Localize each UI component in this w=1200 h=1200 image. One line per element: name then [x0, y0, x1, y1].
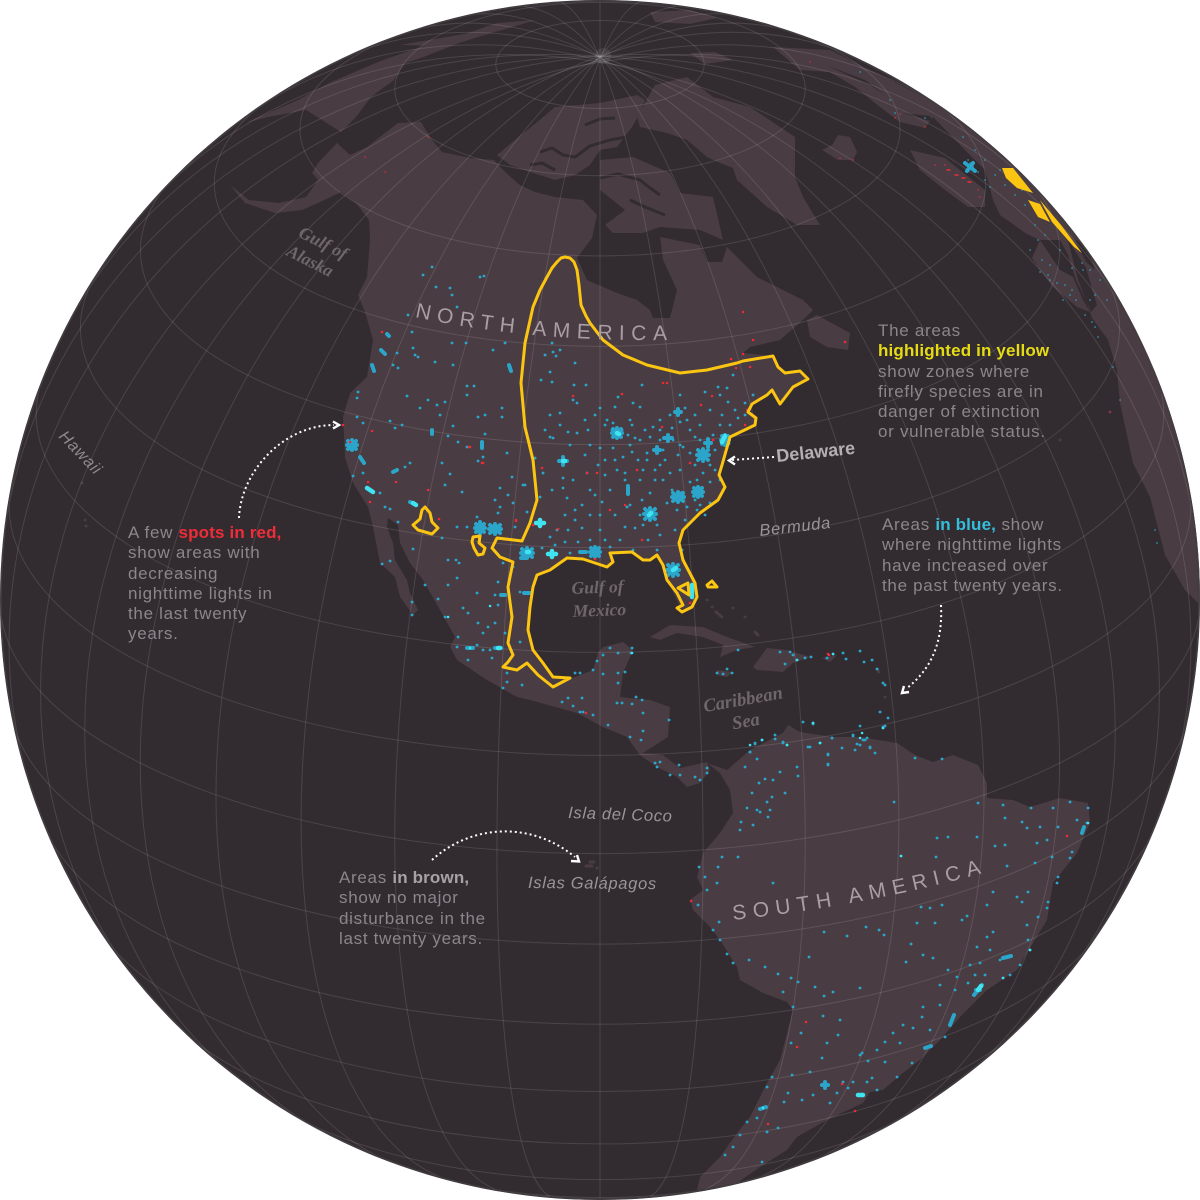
land: Arctic islands: [497, 95, 723, 240]
callout: red spots: A few spots in red,: [128, 523, 282, 542]
callout: blue spots: have increased over: [882, 556, 1048, 575]
callout: brown areas: show no major: [339, 888, 459, 907]
callout: yellow zones: or vulnerable status.: [878, 422, 1046, 441]
globe map: NORTH AMERICA: [416, 303, 667, 340]
continent label: South America: [733, 871, 990, 920]
land: small islands: [82, 412, 1110, 868]
callout: blue spots: [882, 515, 1063, 595]
arrow: to Galápagos: [432, 831, 579, 862]
red decreased-light spots: [343, 62, 1110, 1124]
land: North and Central America: [230, 122, 813, 787]
blue dots: eastern United States: [525, 343, 753, 560]
yellow firefly risk zones: [413, 168, 1082, 687]
label: Isla del Coco: Isla del Coco: [568, 804, 673, 826]
land: Iberia: [1032, 240, 1090, 312]
label: Gulf of Alaska: Alaska: [283, 240, 337, 281]
land: Mediterranean and Baltic seas: [828, 66, 1097, 312]
callout: red spots: the last twenty: [128, 604, 247, 623]
pole glow: [595, 48, 611, 64]
callout: brown areas: [339, 868, 486, 948]
callout: yellow zones: highlighted in yellow: [878, 341, 1049, 360]
callout: red spots: decreasing: [128, 564, 218, 583]
label: Islas Galápagos: Islas Galápagos: [528, 874, 657, 893]
callout: yellow zones: The areas: [878, 321, 961, 340]
blue dots: Europe and Africa: [860, 72, 1157, 543]
label: Caribbean Sea: Caribbean: [702, 683, 784, 717]
label: Gulf of Alaska: Gulf of: [296, 222, 353, 264]
bright cyan light spots: [367, 433, 1088, 1108]
arrow: to red spots: [239, 422, 339, 518]
callout: brown areas: disturbance in the: [339, 909, 486, 928]
land: Europe and Africa: [773, 47, 1200, 605]
bright city centres: [367, 433, 981, 1095]
callout: blue spots: the past twenty years.: [882, 576, 1063, 595]
label: Bermuda: Bermuda: [758, 514, 832, 540]
callout: brown areas: Areas in brown,: [339, 868, 469, 887]
continent label: North America: [415, 317, 672, 340]
land: British Isles: [910, 150, 985, 207]
label: Delaware: Delaware: [775, 438, 856, 466]
yellow outline: Texas pocket: [472, 536, 485, 555]
label: Caribbean Sea: Sea: [731, 710, 761, 734]
callout: yellow zones: [878, 321, 1050, 441]
callout: red spots: [128, 523, 282, 643]
label: Hawaii: Hawaii: [55, 427, 106, 479]
land: Arctic channels: [530, 118, 665, 215]
land: Cuba: [650, 625, 755, 657]
callout: yellow zones: show zones where: [878, 362, 1030, 381]
land: South America: [690, 725, 1090, 1190]
globe map: SOUTH AMERICA: [734, 860, 982, 920]
land: Iceland: [822, 135, 857, 160]
land: Siberia: [245, 20, 536, 132]
place labels: [55, 427, 832, 893]
blue dots: Central America and Caribbean: [562, 648, 888, 780]
blue dots: South America: [698, 724, 1088, 1162]
arrow: to Delaware: [729, 456, 774, 464]
ocean labels: [283, 220, 788, 739]
yellow zones: Europe limb: [1002, 168, 1082, 253]
callout: red spots: years.: [128, 624, 178, 643]
label: Gulf of Mexico: Gulf of: [571, 576, 626, 598]
land: Hispaniola: [753, 648, 810, 672]
callout: brown areas: last twenty years.: [339, 929, 483, 948]
land: polar islands: [400, 10, 733, 64]
blue increased-light spots: [347, 72, 1157, 1162]
callout: red spots: nighttime lights in: [128, 584, 273, 603]
callout: yellow zones: danger of extinction: [878, 402, 1040, 421]
land: Jamaica and Puerto Rico: [717, 655, 837, 677]
yellow outline: Bahamas pocket: [707, 581, 717, 587]
land: Greenland: [637, 77, 820, 225]
blue dots: western North America: [353, 267, 527, 688]
yellow outline: west Mexico pocket: [413, 507, 438, 534]
blue clusters: metropolitan areas: [347, 163, 1084, 1109]
callout: blue spots: Areas in blue, show: [882, 515, 1044, 534]
yellow outline: south Florida pocket: [678, 583, 689, 595]
yellow outline: eastern North America: [492, 257, 808, 687]
land: Newfoundland: [807, 315, 850, 350]
callout: red spots: show areas with: [128, 543, 260, 562]
label: Gulf of Mexico: Mexico: [571, 599, 627, 621]
arrow: to blue spots: [902, 605, 941, 693]
callout: blue spots: where nighttime lights: [882, 535, 1062, 554]
callout: yellow zones: firefly species are in: [878, 382, 1044, 401]
